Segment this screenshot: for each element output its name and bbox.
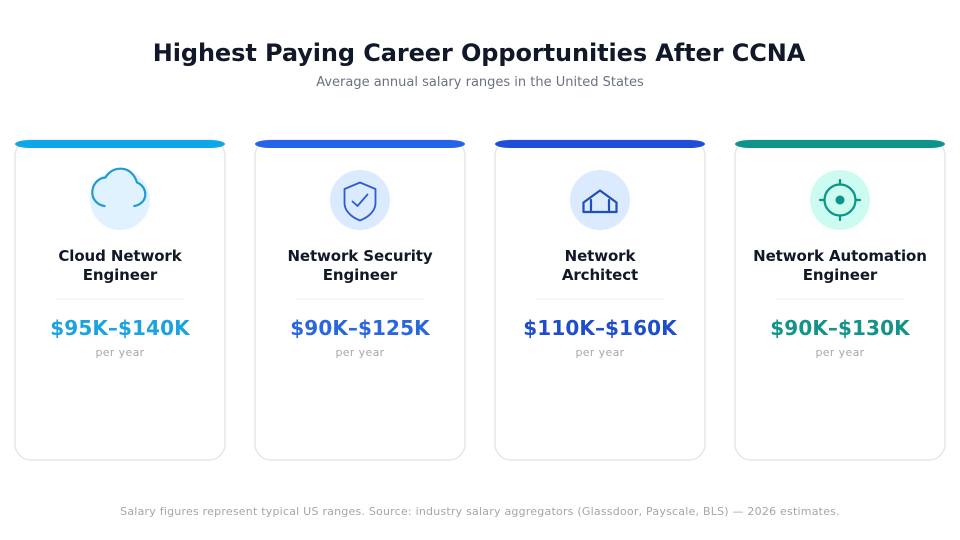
subtitle: Average annual salary ranges in the United States <box>316 75 644 90</box>
role name: Engineer <box>323 266 397 284</box>
card shape: background, accent bar, divider and cloud icon <box>14 139 226 461</box>
panel: network automation engineer <box>734 139 946 461</box>
role name: Engineer <box>803 266 877 284</box>
role name <box>562 247 638 284</box>
salary range: $110K–$160K <box>523 316 677 340</box>
card shape: background, accent bar, divider and shield icon <box>254 139 466 461</box>
role name: Network Automation <box>753 247 927 265</box>
salary range: $90K–$130K <box>770 316 910 340</box>
role name: Network <box>565 247 635 265</box>
per year label: per year <box>335 346 385 359</box>
panel: network architect <box>494 139 706 461</box>
salary range: $90K–$125K <box>290 316 430 340</box>
role name: Network Security <box>287 247 433 265</box>
role name <box>58 247 182 284</box>
role name: Cloud Network <box>58 247 182 265</box>
role name: Engineer <box>83 266 157 284</box>
role name <box>287 247 433 284</box>
per year label: per year <box>575 346 625 359</box>
card shape: background, accent bar, divider and target icon <box>734 139 946 461</box>
panel: network security engineer <box>254 139 466 461</box>
card shape: background, accent bar, divider and building icon <box>494 139 706 461</box>
per year label: per year <box>815 346 865 359</box>
salary range: $95K–$140K <box>50 316 190 340</box>
title: Highest Paying Career Opportunities After CCNA <box>153 39 805 67</box>
footnote: Salary figures represent typical US ranges. Source: industry salary aggregators (Glassdoor, Payscale, BLS) — 2026 estimates. <box>120 505 840 518</box>
panel: cloud network engineer <box>14 139 226 461</box>
role name <box>753 247 927 284</box>
per year label: per year <box>95 346 145 359</box>
role name: Architect <box>562 266 638 284</box>
